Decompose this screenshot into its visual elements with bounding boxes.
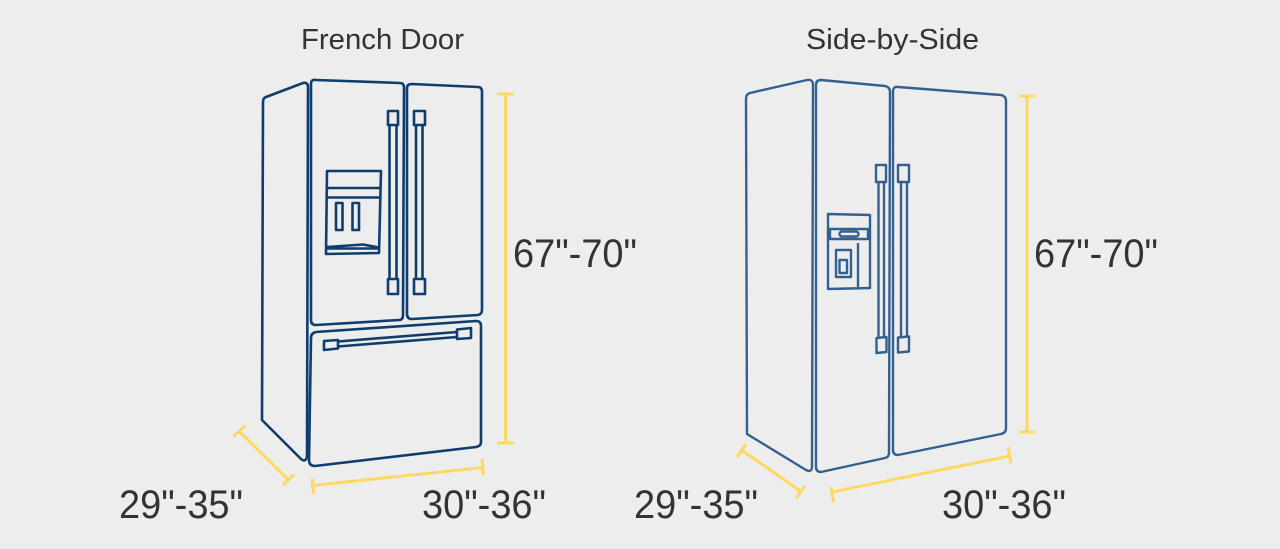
right door handle: [898, 165, 909, 352]
side panel: [262, 83, 308, 460]
depth line: [737, 444, 805, 498]
label: side-by-side height: 67"-70": [1034, 232, 1158, 276]
label: side-by-side width: 30"-36": [942, 483, 1066, 527]
label: French door width: 30"-36": [422, 483, 546, 527]
depth line: [234, 426, 294, 485]
dimension lines: French door: [234, 94, 514, 494]
freezer drawer: [309, 321, 481, 466]
left door handle: [388, 111, 398, 294]
label: side-by-side depth: 29"-35": [634, 483, 758, 527]
left door: [816, 80, 890, 472]
label: French door depth: 29"-35": [119, 483, 243, 527]
height line: [1019, 96, 1035, 432]
illustration: French door refrigerator: [262, 80, 482, 466]
dimension lines: side-by-side: [737, 96, 1035, 502]
water dispenser: [828, 214, 870, 289]
dispenser display: [840, 232, 858, 236]
width line: [312, 459, 484, 494]
heading: Side-by-Side: Side-by-Side: [806, 24, 979, 56]
water dispenser: [326, 171, 381, 254]
freezer handle: [324, 328, 471, 350]
illustration: side-by-side refrigerator: [746, 80, 1006, 472]
label: French door height: 67"-70": [513, 232, 637, 276]
right door handle: [414, 111, 425, 294]
upper left door: [311, 80, 404, 325]
width line: [831, 447, 1011, 502]
right door: [893, 87, 1006, 455]
upper right door: [407, 84, 482, 319]
left door handle: [876, 165, 886, 353]
heading: French Door: French Door: [301, 24, 464, 56]
height line: [497, 94, 514, 443]
side panel: [746, 80, 813, 471]
